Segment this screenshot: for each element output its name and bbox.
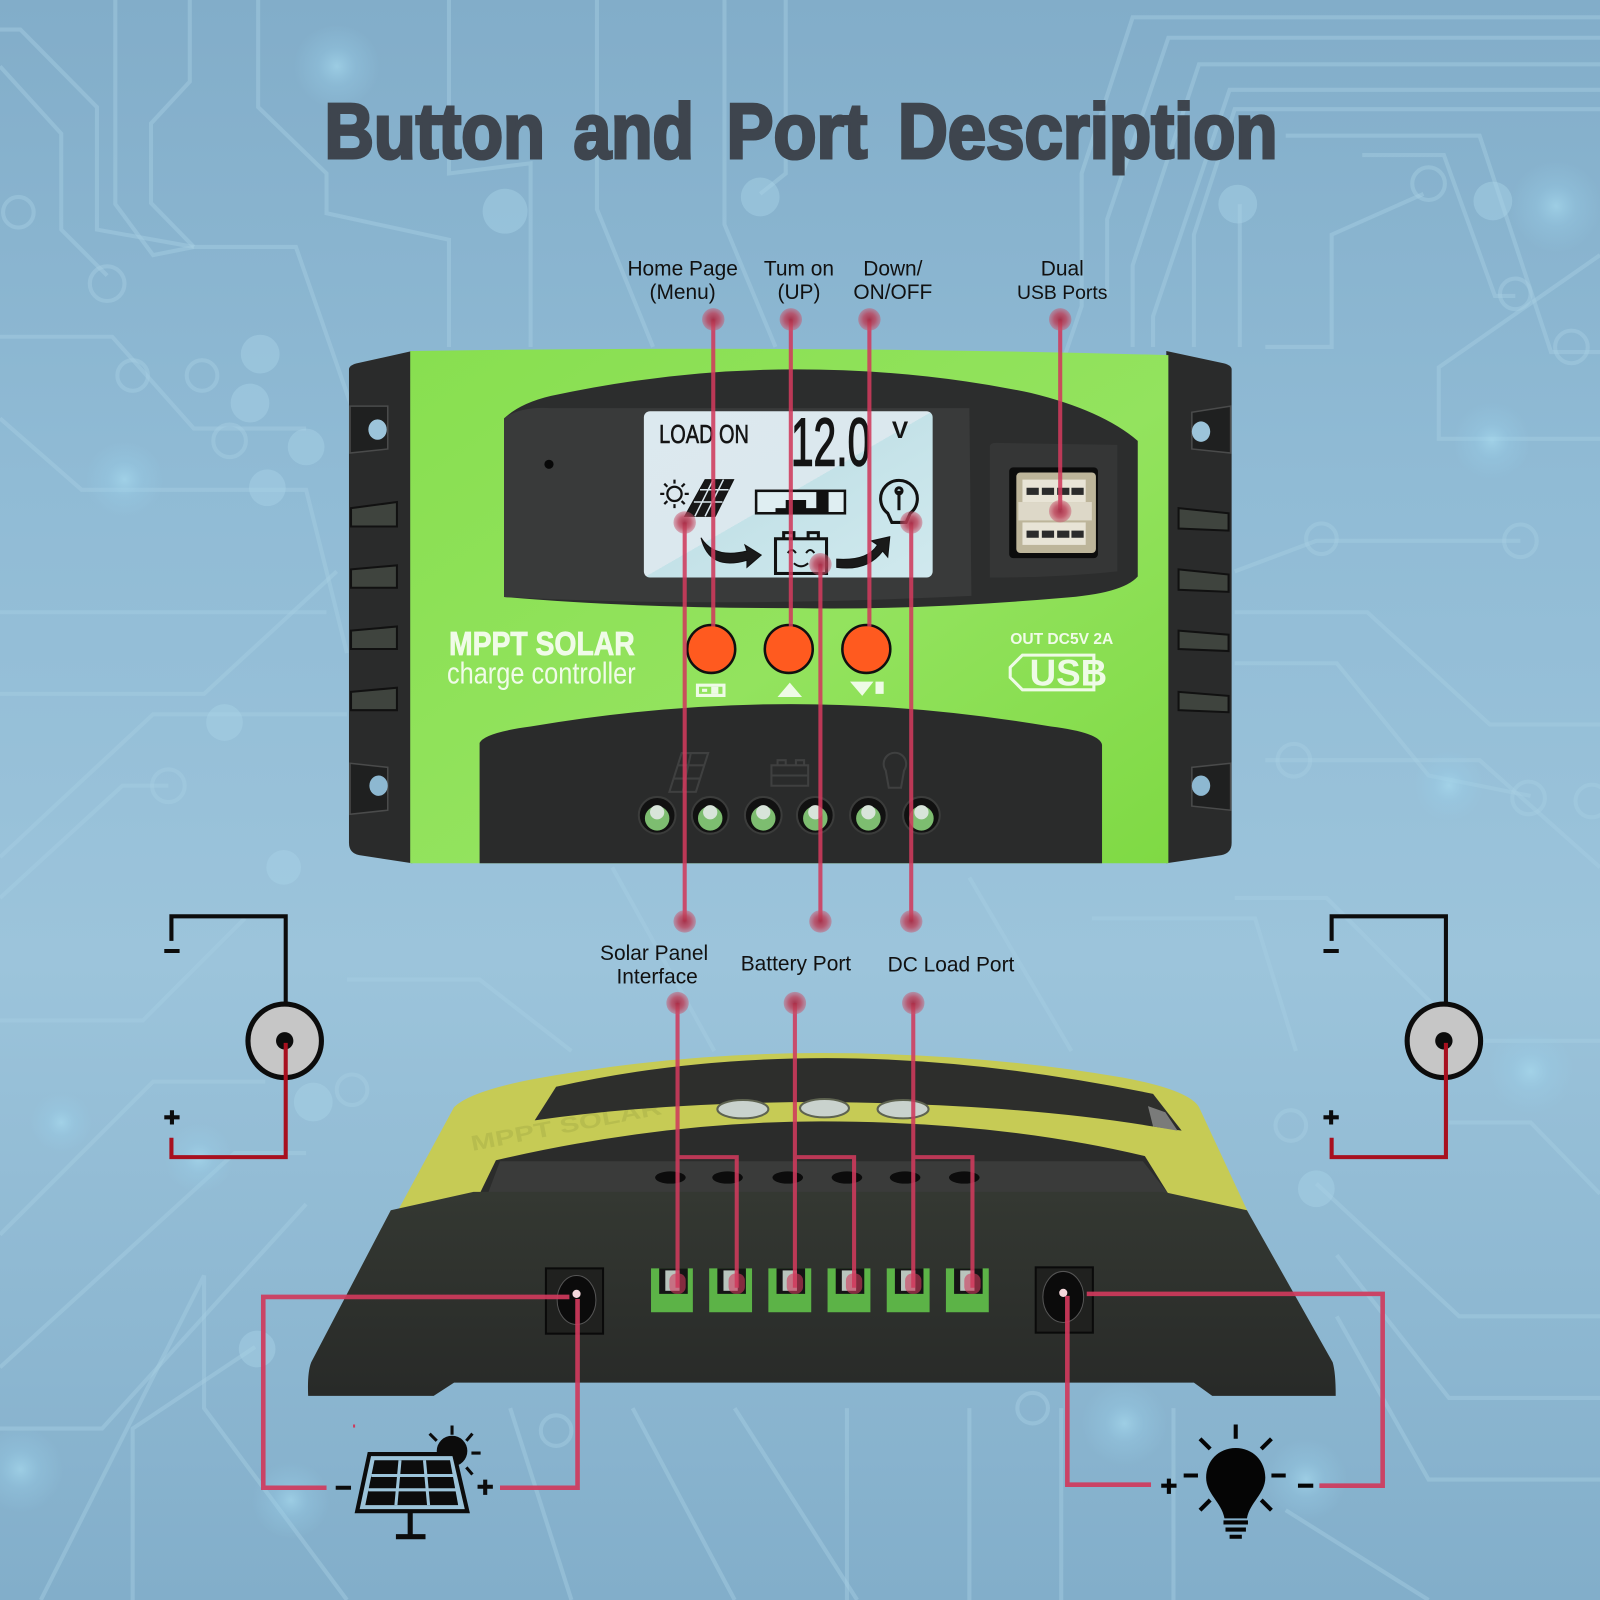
icon: battery level [756, 491, 845, 513]
label: down on/off: ON/OFF [853, 281, 932, 304]
icon: sun [660, 480, 689, 508]
icon: arrows [701, 537, 890, 568]
label: solar panel interface: Solar Panel [600, 942, 708, 965]
label: battery port: Battery Port [741, 952, 851, 975]
label: home page: Home Page [627, 258, 738, 281]
left power jack [546, 1268, 603, 1334]
controller front view [349, 349, 1232, 863]
icon: solar panel [336, 1424, 493, 1537]
display housing [504, 369, 1138, 608]
label: dc load port: DC Load Port [888, 953, 1015, 976]
label: solar panel interface: Interface [616, 966, 698, 989]
wiring: load [1067, 1294, 1383, 1486]
icon: lcd bulb [881, 480, 917, 522]
title: Button [324, 89, 545, 175]
terminal blocks [651, 1268, 989, 1312]
icon: light bulb [1161, 1424, 1313, 1537]
label: dual usb: Dual [1041, 258, 1084, 281]
label: turn on: Tum on [764, 258, 834, 281]
icon: battery face [776, 533, 827, 573]
right power jack [1036, 1267, 1093, 1333]
controller bottom view [308, 1053, 1336, 1396]
callout leader lines [678, 319, 1060, 1288]
top buttons [717, 1099, 929, 1118]
yellow top shell [396, 1053, 1249, 1214]
branding text: OUT DC5V 2A [1010, 631, 1113, 648]
jack pins [572, 1289, 1067, 1298]
label: turn on: (UP) [777, 281, 820, 304]
green faceplate [410, 349, 1168, 863]
label: down on/off: Down/ [863, 258, 922, 281]
LCD screen: LOAD ON [659, 421, 749, 449]
wiring: solar panel [263, 1297, 578, 1488]
branding text: charge controller [447, 657, 636, 691]
screw holes [655, 1171, 980, 1184]
title [324, 89, 1278, 175]
top labels [627, 258, 1107, 304]
faint housing icons [669, 753, 906, 792]
label: dual usb: USB Ports [1017, 282, 1107, 304]
branding text [447, 626, 1113, 691]
USB cutout [1148, 1106, 1178, 1131]
callout dots [666, 308, 1071, 1014]
LCD screen: V [892, 417, 909, 444]
label: home page: (Menu) [650, 281, 716, 304]
title: and [573, 89, 694, 175]
terminal screws [639, 797, 940, 834]
USB logo: USB [1030, 653, 1107, 694]
title: Port [727, 89, 867, 175]
USB panel [990, 443, 1117, 578]
polarity diagram: right [1323, 916, 1481, 1157]
orange buttons [687, 625, 890, 673]
button icons [696, 682, 884, 697]
bottom labels [600, 942, 1015, 989]
title: Description [898, 89, 1278, 175]
LCD screen [644, 405, 933, 578]
polarity diagram: left [164, 916, 321, 1157]
recessed terminal area [480, 1121, 1168, 1194]
terminal housing [480, 704, 1102, 863]
icon: lcd solar panel [685, 480, 734, 516]
faint shell lettering: MPPT SOLAR [469, 1095, 664, 1156]
side brackets [349, 351, 1232, 863]
LCD screen: 12.0 [791, 405, 870, 480]
dark base [308, 1192, 1336, 1396]
branding text: MPPT SOLAR [449, 626, 635, 663]
recessed display [535, 1058, 1182, 1131]
